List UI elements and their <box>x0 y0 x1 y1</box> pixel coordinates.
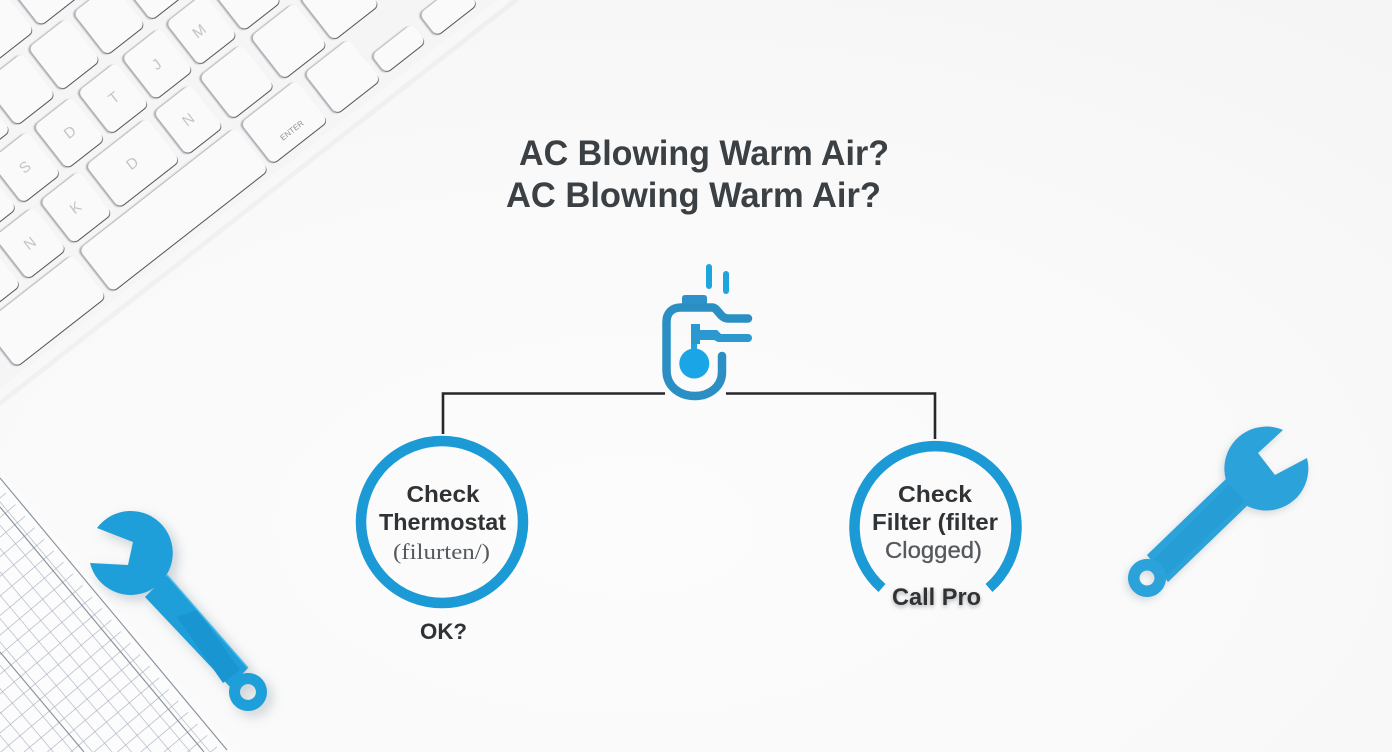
node: check filter: Check <box>898 481 972 507</box>
keyboard: N <box>179 110 198 130</box>
keyboard: N <box>21 234 40 254</box>
node: check thermostat <box>361 441 523 603</box>
icon: right wrench <box>1128 427 1308 597</box>
title: AC Blowing Warm Air? <box>506 176 881 215</box>
icon: AC unit <box>666 264 752 396</box>
label: call pro: Call Pro <box>892 584 981 611</box>
label: OK?: OK? <box>420 619 467 644</box>
node: check filter: Clogged) <box>885 537 982 563</box>
connector lines <box>443 394 935 439</box>
keyboard: M <box>189 21 210 42</box>
keyboard <box>0 0 515 404</box>
title <box>506 134 889 215</box>
node: check thermostat: (filurten/) <box>393 539 490 564</box>
keyboard: S <box>16 158 35 177</box>
keyboard: ENTER <box>279 119 306 142</box>
keyboard: D <box>123 154 142 174</box>
notebook grid <box>0 470 235 752</box>
keyboard: D <box>61 122 80 143</box>
node: check filter: Filter (filter <box>872 509 998 535</box>
node: check filter <box>854 446 1016 588</box>
node: check thermostat: Check <box>406 481 480 507</box>
keyboard: J <box>149 56 165 74</box>
keyboard: T <box>106 89 123 108</box>
title: AC Blowing Warm Air? <box>519 134 889 173</box>
keyboard: K <box>67 198 85 218</box>
icon: left wrench <box>90 511 267 711</box>
node: check thermostat: Thermostat <box>379 509 506 535</box>
